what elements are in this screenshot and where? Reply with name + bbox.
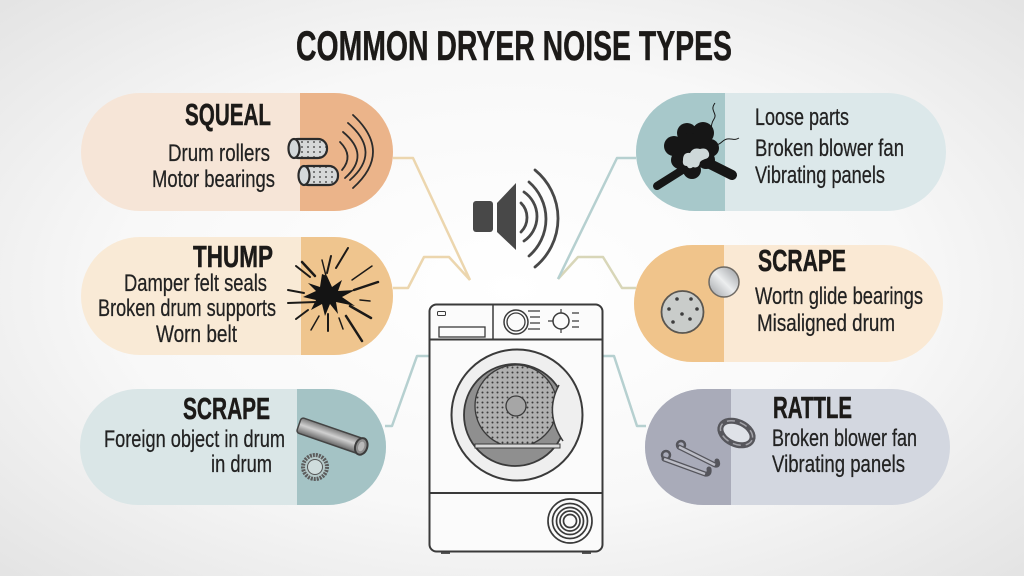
icon: glide disc and metal button: [662, 267, 739, 333]
icon: rollers and sound waves: [288, 115, 373, 188]
text: loose parts causes: [755, 104, 904, 189]
dryer body: [430, 304, 602, 552]
text: scrape causes: Wortn glide bearings: [755, 283, 923, 310]
icon: pipe and ring: [296, 417, 370, 479]
dryer feet: [441, 551, 591, 554]
door: [452, 350, 582, 480]
heading: thump: THUMP: [193, 239, 273, 274]
panel: thump: [81, 237, 393, 355]
panel: scrape right: [634, 243, 943, 362]
text: scrape causes: [104, 426, 285, 478]
icon: speaker: [473, 170, 558, 267]
panel: squeal: [81, 93, 393, 211]
text: rattle causes: [772, 425, 917, 478]
text: scrape causes: [755, 283, 923, 337]
icon: impact burst: [288, 248, 378, 341]
text: squeal causes: Drum rollers: [168, 140, 270, 167]
text: loose parts causes: Loose parts: [755, 104, 849, 131]
connector lines: teal: [385, 158, 646, 426]
text: rattle causes: Vibrating panels: [772, 451, 905, 478]
text: thump causes: Worn belt: [156, 321, 237, 348]
icon: smoke cloud and broken rod: [657, 103, 739, 186]
title: COMMON DRYER NOISE TYPES: [296, 22, 732, 69]
heading: rattle: RATTLE: [773, 390, 852, 425]
illustration: dryer: [430, 304, 602, 554]
heading: squeal: SQUEAL: [185, 97, 271, 132]
text: scrape causes: Foreign object in drum: [104, 426, 285, 453]
text: squeal causes: Motor bearings: [152, 166, 275, 193]
text: scrape causes: Misaligned drum: [757, 310, 895, 337]
heading: scrape: SCRAPE: [758, 243, 846, 278]
control panel: [430, 305, 602, 340]
icon: broken ring and hooks: [662, 416, 757, 474]
text: squeal causes: [152, 140, 275, 193]
base divider: [430, 492, 602, 494]
panel: rattle: [645, 389, 950, 505]
text: thump causes: [98, 270, 276, 348]
text: rattle causes: Broken blower fan: [772, 425, 917, 452]
text: thump causes: Damper felt seals: [124, 270, 267, 297]
panel: loose parts: [636, 93, 946, 211]
text: loose parts causes: Vibrating panels: [755, 162, 885, 189]
text: thump causes: Broken drum supports: [98, 295, 276, 322]
connector lines: tan: [393, 158, 636, 288]
text: loose parts causes: Broken blower fan: [755, 135, 904, 162]
heading: scrape: SCRAPE: [183, 391, 270, 426]
panel: scrape left: [80, 389, 386, 505]
vent: [548, 499, 592, 543]
text: scrape causes: in drum: [211, 451, 272, 478]
